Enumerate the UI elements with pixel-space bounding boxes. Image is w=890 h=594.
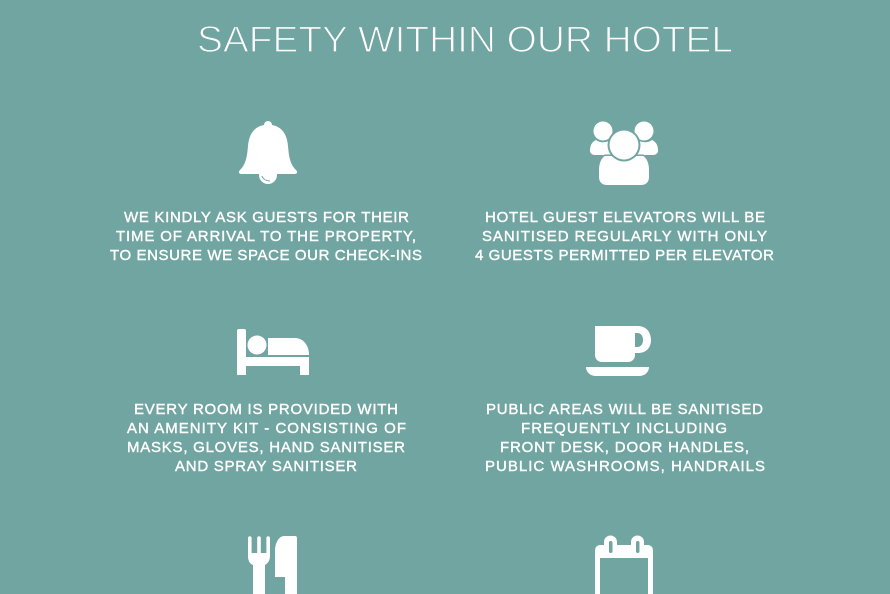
title: SAFETY WITHIN OUR HOTEL bbox=[197, 18, 733, 60]
icon: fork and knife bbox=[248, 536, 297, 594]
icon: group of guests bbox=[590, 122, 658, 185]
text: amenity kit: AN AMENITY KIT - CONSISTING OF bbox=[127, 420, 406, 437]
text: amenity kit bbox=[127, 401, 406, 475]
text: check-in arrival: TO ENSURE WE SPACE OUR CHECK-INS bbox=[110, 247, 422, 264]
text: elevators bbox=[475, 209, 774, 264]
text: check-in arrival: WE KINDLY ASK GUESTS FOR THEIR bbox=[124, 209, 409, 226]
text: amenity kit: AND SPRAY SANITISER bbox=[175, 458, 357, 475]
text: amenity kit: EVERY ROOM IS PROVIDED WITH bbox=[134, 401, 398, 418]
text: public areas: FRONT DESK, DOOR HANDLES, bbox=[500, 439, 749, 456]
panel: check-in arrival bbox=[110, 121, 422, 264]
panel: elevators bbox=[475, 122, 774, 264]
text: public areas: PUBLIC WASHROOMS, HANDRAILS bbox=[485, 458, 765, 475]
text: public areas bbox=[485, 401, 765, 475]
panel: public areas bbox=[485, 326, 765, 475]
icon: coffee cup bbox=[586, 326, 651, 376]
text: check-in arrival: TIME OF ARRIVAL TO THE PROPERTY, bbox=[116, 228, 416, 245]
text: check-in arrival bbox=[110, 209, 422, 264]
icon: calendar bbox=[595, 536, 653, 594]
text: elevators: SANITISED REGULARLY WITH ONLY bbox=[482, 228, 767, 245]
text: public areas: FREQUENTLY INCLUDING bbox=[521, 420, 727, 437]
text: elevators: HOTEL GUEST ELEVATORS WILL BE bbox=[485, 209, 765, 226]
icon: bell bbox=[239, 121, 297, 184]
panel: amenity kit bbox=[127, 329, 406, 475]
text: amenity kit: MASKS, GLOVES, HAND SANITISER bbox=[127, 439, 405, 456]
text: public areas: PUBLIC AREAS WILL BE SANITISED bbox=[486, 401, 763, 418]
icon: bed bbox=[237, 329, 309, 375]
text: elevators: 4 GUESTS PERMITTED PER ELEVATOR bbox=[475, 247, 774, 264]
